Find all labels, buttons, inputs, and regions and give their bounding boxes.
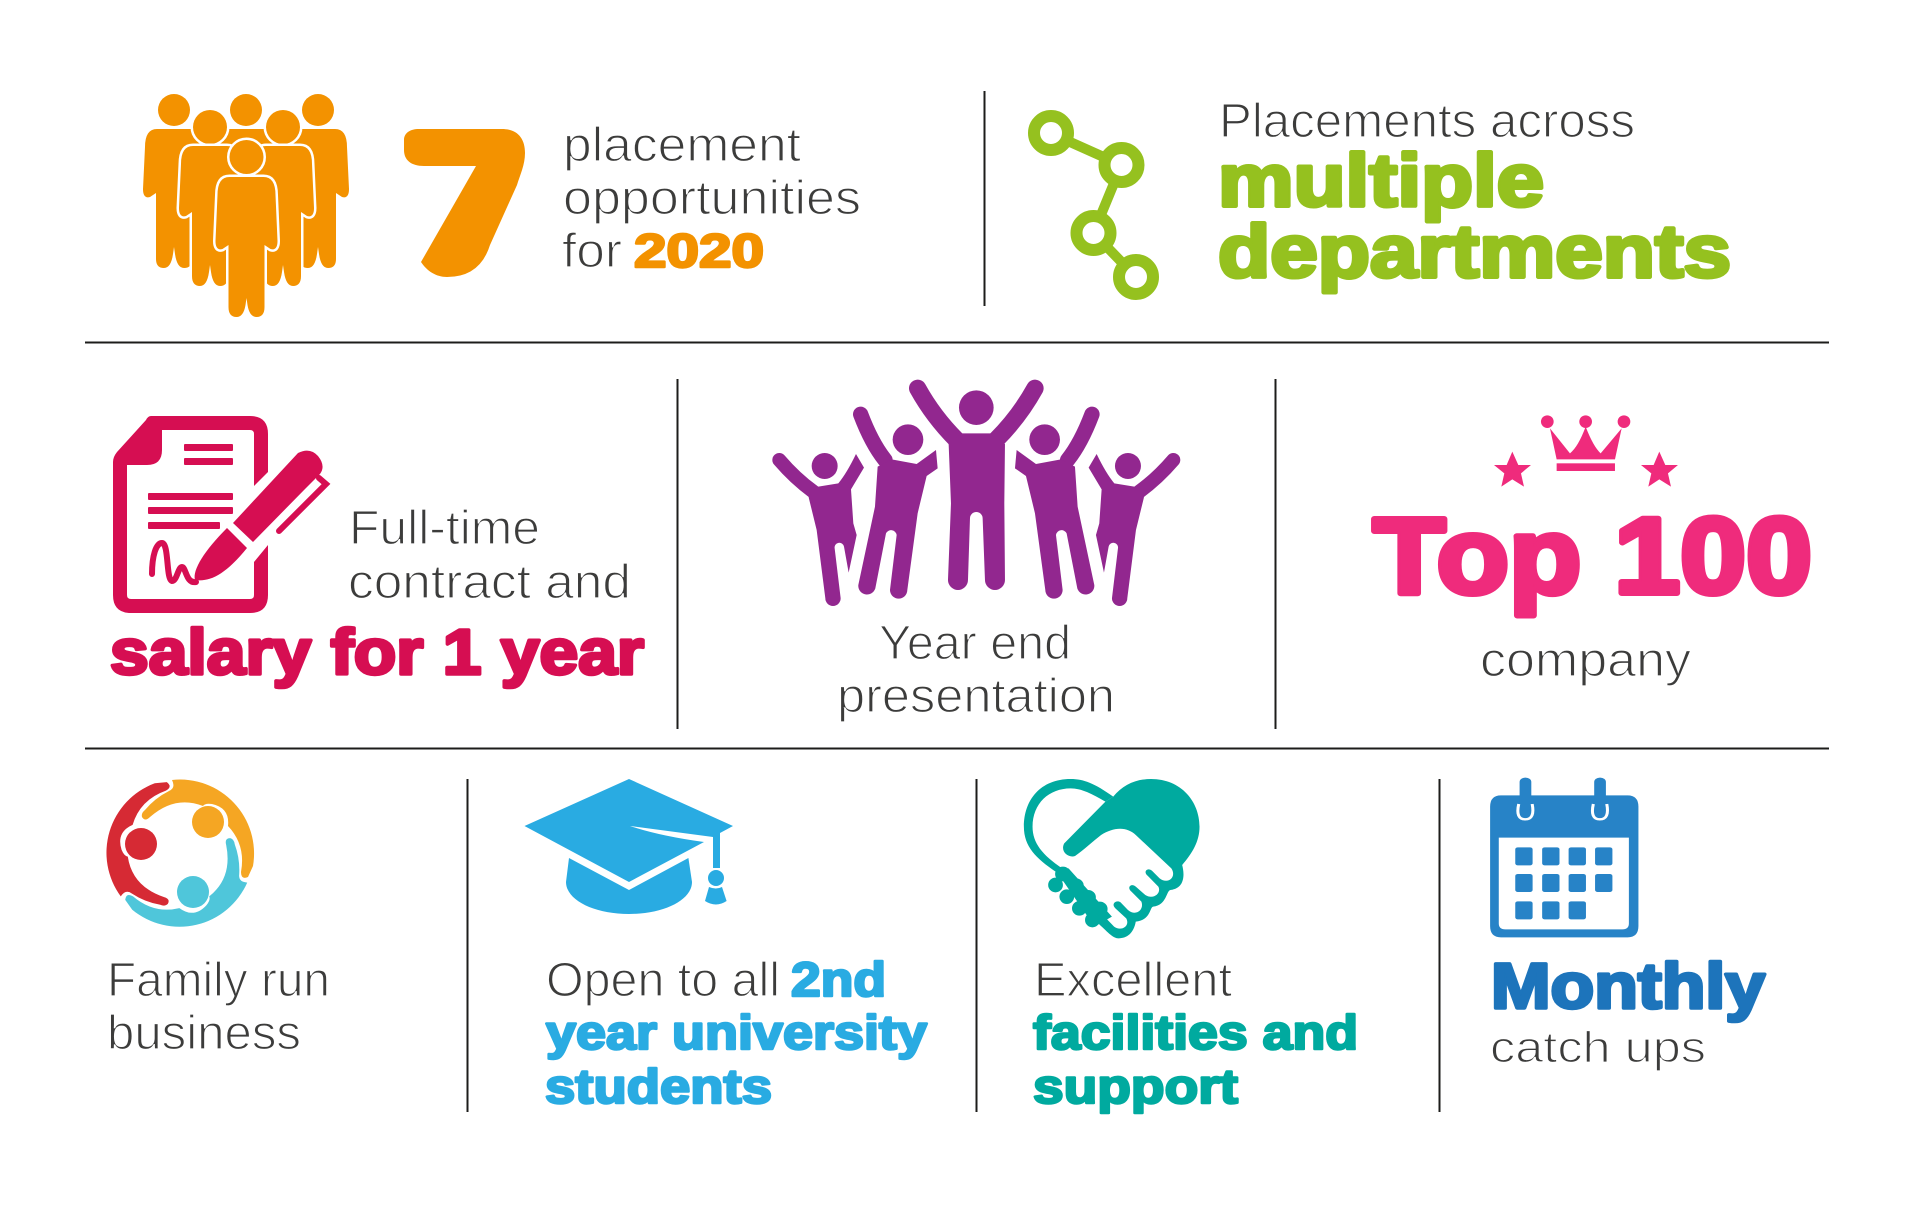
text: excellent facilities and support bbox=[1033, 954, 1358, 1114]
text: monthly catch ups bbox=[1490, 950, 1765, 1072]
text: family run business: business bbox=[107, 1007, 301, 1060]
panel: multiple departments bbox=[1034, 95, 1731, 294]
panel: monthly catch ups bbox=[1490, 778, 1765, 1072]
text: placement opportunities: 2020 bbox=[634, 224, 764, 277]
text: family run business bbox=[107, 954, 330, 1060]
text: placements across multiple departments: multiple bbox=[1218, 139, 1544, 222]
text: open to all 2nd year university students: students bbox=[545, 1061, 772, 1114]
text: top 100: Top 100 bbox=[1373, 495, 1812, 616]
text: monthly catch ups: catch ups bbox=[1490, 1023, 1706, 1072]
text: year end presentation bbox=[837, 617, 1115, 723]
text: placement opportunities: for bbox=[562, 225, 622, 278]
text: open to all 2nd year university students: year university bbox=[546, 1007, 927, 1060]
text: placements across multiple departments: Placements across bbox=[1219, 95, 1635, 148]
panel: full-time contract bbox=[110, 416, 644, 688]
panel: top 100 company bbox=[1373, 415, 1812, 687]
text: full-time contract and salary bbox=[110, 502, 644, 688]
text: placement opportunities: opportunities bbox=[563, 172, 861, 225]
icon: crown and stars bbox=[1494, 415, 1678, 487]
text: full-time contract and salary: contract and bbox=[348, 556, 631, 609]
panel: open to all students bbox=[524, 779, 927, 1114]
icon: graduation cap bbox=[524, 779, 733, 914]
icon: contract and pen bbox=[113, 416, 330, 613]
text: year end presentation: presentation bbox=[837, 670, 1115, 723]
panel: year end presentation bbox=[779, 388, 1173, 723]
icon: calendar bbox=[1490, 778, 1638, 937]
icon: group of people bbox=[143, 94, 349, 317]
text: open to all 2nd year university students: Open to all bbox=[546, 954, 780, 1007]
text: year end presentation: Year end bbox=[879, 617, 1071, 670]
text: company: company bbox=[1480, 634, 1691, 687]
icon: handshake heart bbox=[1024, 779, 1200, 938]
panel: family run business bbox=[79, 776, 330, 1060]
text: excellent facilities and support: facilities and bbox=[1033, 1007, 1358, 1060]
icon: cheering people bbox=[779, 388, 1173, 606]
icon: three people circle bbox=[79, 776, 263, 954]
text: placements across multiple departments bbox=[1218, 95, 1731, 293]
text: placement opportunities bbox=[562, 119, 861, 278]
text: full-time contract and salary: Full-time bbox=[349, 502, 540, 555]
text: open to all 2nd year university students: 2nd bbox=[791, 954, 886, 1007]
text: excellent facilities and support: support bbox=[1033, 1061, 1238, 1114]
text: monthly catch ups: Monthly bbox=[1491, 950, 1765, 1022]
text: open to all 2nd year university students bbox=[545, 954, 927, 1114]
text: family run business: Family run bbox=[107, 954, 330, 1007]
text: full-time contract and salary: salary for 1 year bbox=[110, 616, 644, 688]
big number 7 bbox=[404, 129, 525, 277]
icon: connected nodes bbox=[1034, 116, 1153, 294]
text: placement opportunities: placement bbox=[563, 119, 801, 172]
text: placements across multiple departments: departments bbox=[1218, 210, 1731, 293]
panel: 7 placement opportunities bbox=[143, 94, 861, 317]
panel: excellent facilities and support bbox=[1024, 779, 1358, 1114]
text: excellent facilities and support: Excellent bbox=[1034, 954, 1232, 1007]
